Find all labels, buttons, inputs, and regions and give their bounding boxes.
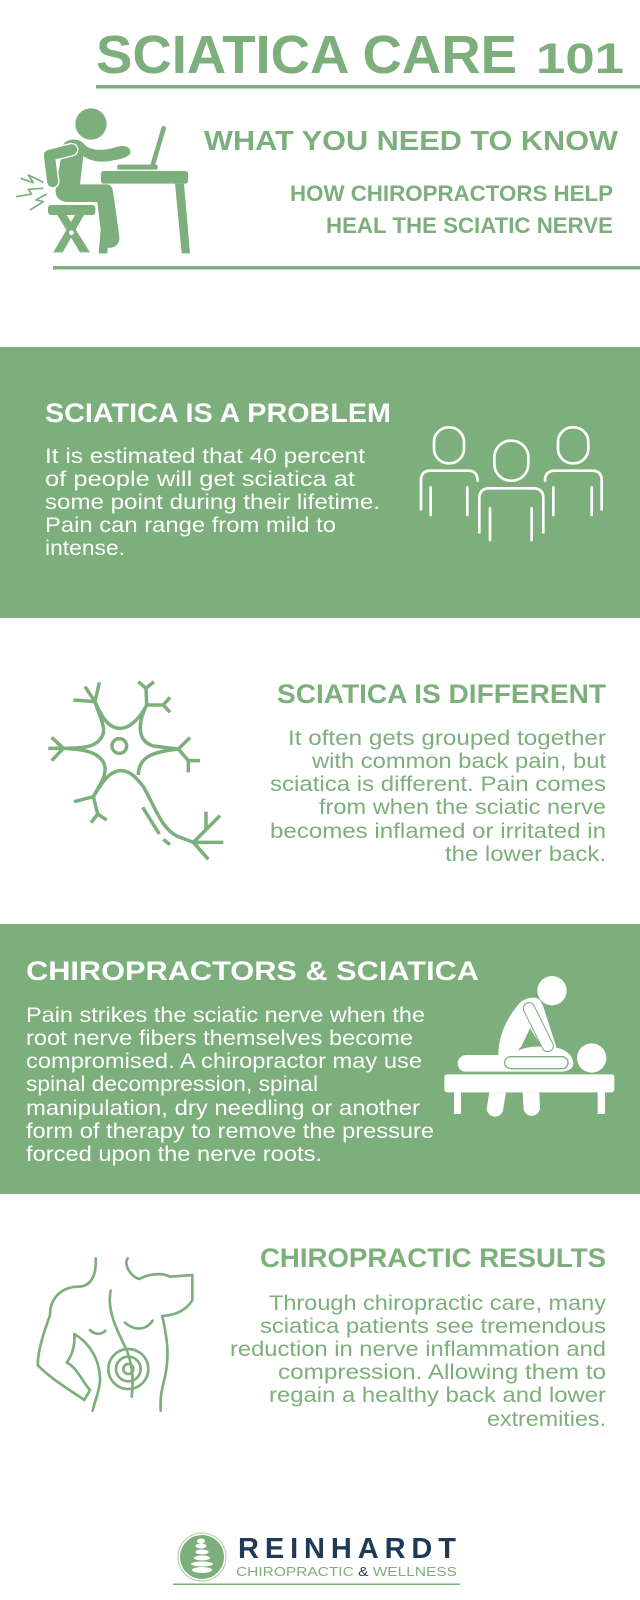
- text block: with common back pain, but: [311, 750, 606, 773]
- icon: neuron: [48, 682, 223, 859]
- logo: Reinhardt Chiropractic & Wellness: [173, 1533, 460, 1585]
- panel: chiropractors and sciatica: [0, 924, 640, 1194]
- text block: extremities.: [487, 1408, 606, 1431]
- text block: becomes inflamed or irritated in: [270, 820, 606, 843]
- icon: group of people: [421, 427, 602, 540]
- text block: sciatica is different. Pain comes: [270, 773, 606, 796]
- text block: compromised. A chiropractor may use: [26, 1050, 422, 1073]
- icon: chiropractor treating patient: [444, 976, 614, 1117]
- title: SCIATICA CARE: [96, 25, 517, 85]
- title: 101: [536, 35, 624, 83]
- text block: It is estimated that 40 percent: [45, 445, 365, 468]
- text block: root nerve fibers themselves become: [26, 1027, 413, 1050]
- text block: forced upon the nerve roots.: [26, 1143, 322, 1166]
- icon: stacked stones: [178, 1533, 226, 1581]
- text block: form of therapy to remove the pressure: [26, 1120, 434, 1143]
- text block: Through chiropractic care, many: [269, 1292, 607, 1315]
- heading: CHIROPRACTORS & SCIATICA: [26, 956, 479, 986]
- text block: compression. Allowing them to: [278, 1361, 606, 1384]
- text block: intense.: [45, 537, 125, 560]
- text block: [45, 445, 380, 560]
- text block: the lower back.: [445, 843, 606, 866]
- icon: person at desk with back pain: [16, 108, 190, 253]
- text block: from when the sciatic nerve: [319, 796, 606, 819]
- heading: CHIROPRACTIC RESULTS: [260, 1243, 606, 1273]
- text block: [230, 1292, 607, 1431]
- text block: some point during their lifetime.: [45, 491, 380, 514]
- text block: It often gets grouped together: [288, 727, 606, 750]
- text block: Pain can range from mild to: [45, 514, 336, 537]
- subheading: how chiropractors help: [290, 181, 613, 238]
- text block: Pain strikes the sciatic nerve when the: [26, 1004, 425, 1027]
- heading: SCIATICA IS A PROBLEM: [45, 398, 391, 428]
- logo: Reinhardt Chiropractic & Wellness: REINHARDT: [238, 1533, 456, 1565]
- section: sciatica is different: [270, 679, 607, 866]
- subheading: how chiropractors help: HOW CHIROPRACTORS HELP: [290, 181, 613, 206]
- text block: [270, 727, 606, 866]
- text block: sciatica patients see tremendous: [260, 1315, 606, 1338]
- text block: regain a healthy back and lower: [269, 1384, 606, 1407]
- icon: back with nerve pain: [38, 1258, 192, 1411]
- logo: Reinhardt Chiropractic & Wellness: CHIROPRACTIC & WELLNESS: [236, 1564, 457, 1579]
- subtitle: what you need to know: WHAT YOU NEED TO KNOW: [204, 125, 619, 156]
- text block: reduction in nerve inflammation and: [230, 1338, 606, 1361]
- heading: SCIATICA IS DIFFERENT: [277, 679, 607, 709]
- subheading: how chiropractors help: HEAL THE SCIATIC NERVE: [326, 213, 613, 238]
- text block: [26, 1004, 434, 1166]
- text block: spinal decompression, spinal: [26, 1073, 318, 1096]
- panel: sciatica is a problem: [0, 347, 640, 618]
- text block: manipulation, dry needling or another: [26, 1097, 420, 1120]
- text block: of people will get sciatica at: [45, 468, 355, 491]
- section: chiropractic results: [230, 1243, 607, 1431]
